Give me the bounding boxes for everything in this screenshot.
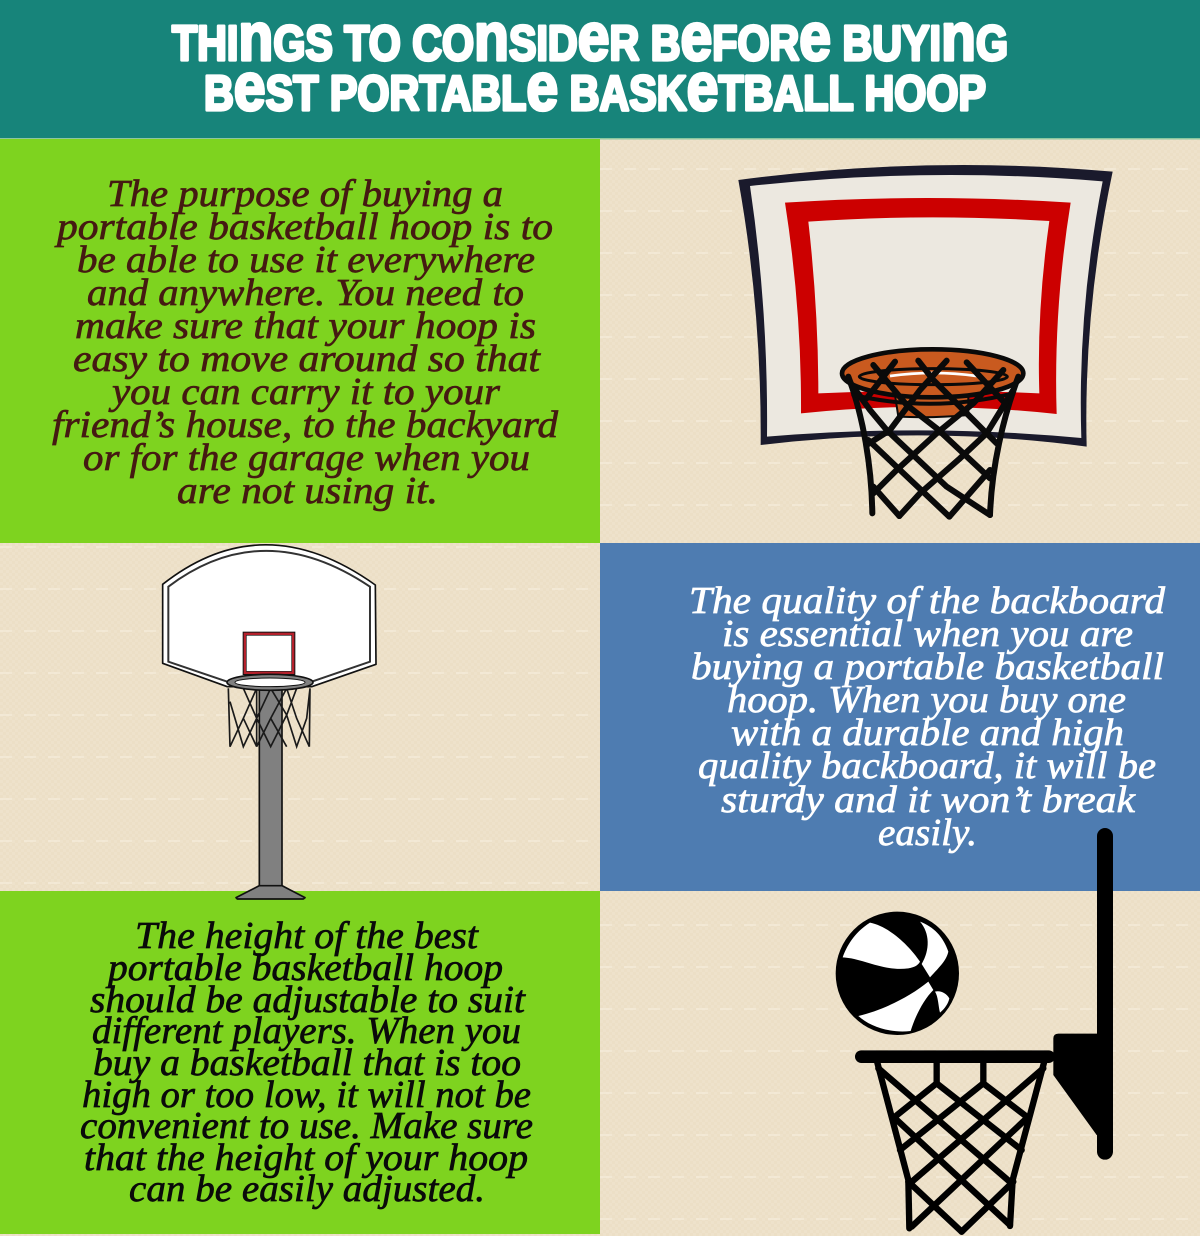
backboard quality paragraph: hoop. When you buy one bbox=[727, 679, 1126, 721]
height adjustment paragraph: The height of the best bbox=[135, 915, 479, 957]
backboard quality paragraph: The quality of the backboard bbox=[689, 580, 1166, 622]
height adjustment paragraph: different players. When you bbox=[92, 1010, 521, 1052]
basketball bbox=[836, 912, 959, 1035]
backboard quality paragraph: easily. bbox=[878, 812, 977, 854]
height adjustment paragraph: can be easily adjusted. bbox=[129, 1168, 485, 1210]
height adjustment paragraph: should be adjustable to suit bbox=[90, 979, 527, 1021]
backboard face bbox=[750, 175, 1103, 438]
backboard bbox=[163, 545, 376, 687]
height adjustment paragraph bbox=[80, 915, 533, 1210]
portability paragraph: portable basketball hoop is to bbox=[54, 206, 553, 248]
pole bbox=[1097, 828, 1113, 1160]
icon: hoop on pole bbox=[163, 545, 376, 899]
backboard quality paragraph: with a durable and high bbox=[731, 712, 1124, 754]
bracket bbox=[1053, 1034, 1100, 1135]
portability paragraph: are not using it. bbox=[177, 470, 438, 512]
panel: height adjustment text bbox=[0, 891, 600, 1234]
net bbox=[228, 688, 310, 747]
portability paragraph: The purpose of buying a bbox=[107, 173, 503, 215]
icon: black hoop side view with ball bbox=[836, 828, 1113, 1232]
height adjustment paragraph: that the height of your hoop bbox=[84, 1137, 528, 1179]
panel: backboard quality text bbox=[600, 543, 1200, 891]
title: THInGS TO COnSIDeR BeFORe BUYInG bbox=[172, 0, 1008, 75]
red shooter square bbox=[243, 632, 295, 675]
title bbox=[172, 0, 1008, 125]
icon: backboard with orange ball and net bbox=[738, 165, 1113, 517]
net bbox=[877, 1063, 1044, 1232]
backboard quality paragraph bbox=[689, 580, 1166, 854]
portability paragraph: or for the garage when you bbox=[83, 437, 530, 479]
title: BeST PORTABLe BASKeTBALL HOOP bbox=[204, 49, 986, 125]
portability paragraph: be able to use it everywhere bbox=[77, 239, 535, 281]
rim bbox=[227, 674, 313, 690]
portability paragraph: friend’s house, to the backyard bbox=[52, 404, 559, 446]
backboard quality paragraph: sturdy and it won’t break bbox=[721, 779, 1136, 821]
portability paragraph: you can carry it to your bbox=[108, 371, 500, 413]
portability paragraph: and anywhere. You need to bbox=[87, 272, 524, 314]
pole bbox=[259, 688, 282, 886]
height adjustment paragraph: convenient to use. Make sure bbox=[80, 1105, 533, 1147]
backboard quality paragraph: is essential when you are bbox=[722, 613, 1133, 655]
header banner bbox=[0, 0, 1200, 140]
basketball behind net bbox=[842, 349, 1023, 417]
height adjustment paragraph: high or too low, it will not be bbox=[82, 1074, 531, 1116]
panel: portability text bbox=[0, 139, 600, 543]
portability paragraph bbox=[52, 173, 559, 512]
height adjustment paragraph: buy a basketball that is too bbox=[93, 1042, 521, 1084]
pole base bbox=[236, 886, 305, 899]
portability paragraph: easy to move around so that bbox=[73, 338, 542, 380]
red target square bbox=[785, 198, 1071, 414]
backboard quality paragraph: quality backboard, it will be bbox=[698, 745, 1156, 787]
backboard frame bbox=[738, 165, 1113, 447]
backboard inner line bbox=[168, 551, 370, 682]
height adjustment paragraph: portable basketball hoop bbox=[105, 947, 503, 989]
backboard quality paragraph: buying a portable basketball bbox=[691, 646, 1164, 688]
net bbox=[848, 361, 1018, 517]
rim bbox=[855, 1050, 1055, 1063]
portability paragraph: make sure that your hoop is bbox=[75, 305, 536, 347]
